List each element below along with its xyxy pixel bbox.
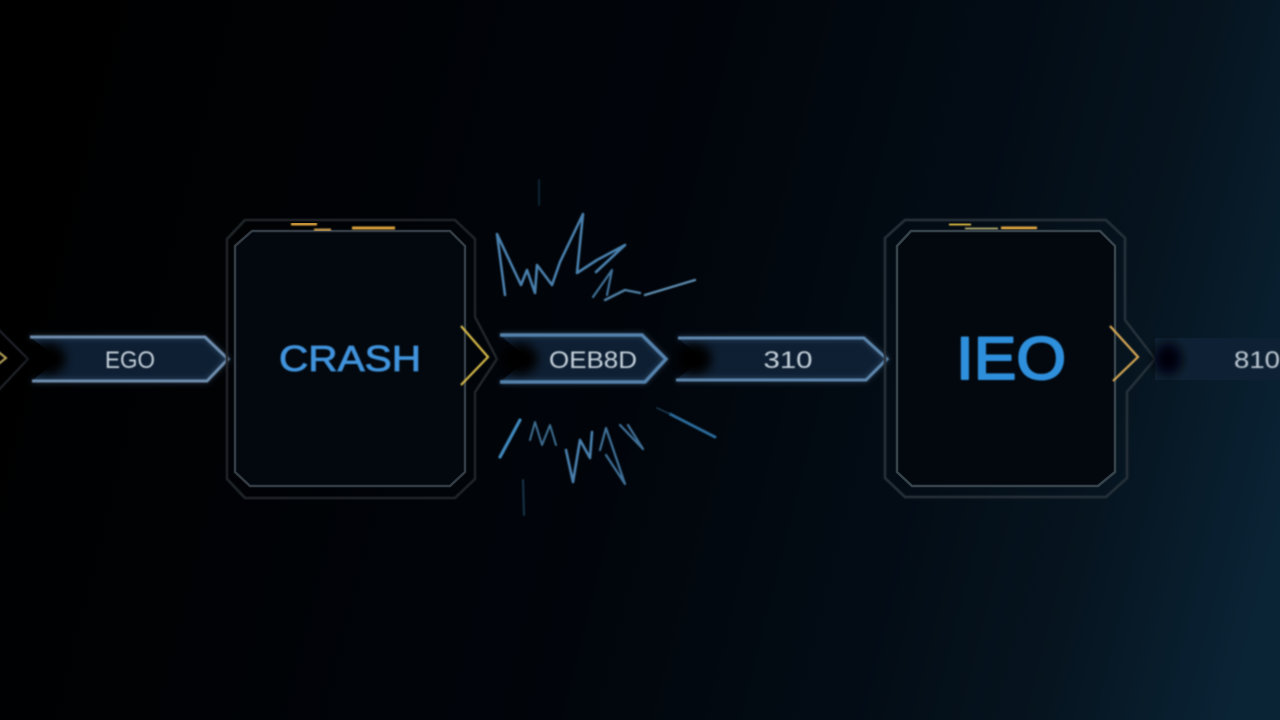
lower burst (500, 180, 715, 515)
card chevron (461, 326, 488, 385)
upper burst (497, 214, 695, 300)
left edge connector (0, 325, 28, 395)
card heading: CRASH (279, 338, 421, 379)
card chevron (1110, 326, 1138, 381)
arrow: label 810 (1152, 338, 1280, 380)
card: IEO (885, 220, 1155, 497)
arrow: label 310 (676, 338, 887, 380)
spark burst (497, 180, 715, 515)
arrow: label 810: 810 (1234, 347, 1280, 374)
card accent: amber ticks (291, 224, 395, 230)
card accent: amber ticks (949, 224, 1037, 229)
arrow: label 310: 310 (764, 347, 812, 374)
arrow: label OEB8D: OEB8D (549, 347, 637, 374)
arrow: label OEB8D (500, 335, 668, 382)
arrow: label EGO: EGO (105, 347, 155, 374)
card heading: IEO (956, 325, 1066, 392)
arrow: label EGO (30, 337, 228, 381)
card: CRASH (227, 220, 497, 498)
